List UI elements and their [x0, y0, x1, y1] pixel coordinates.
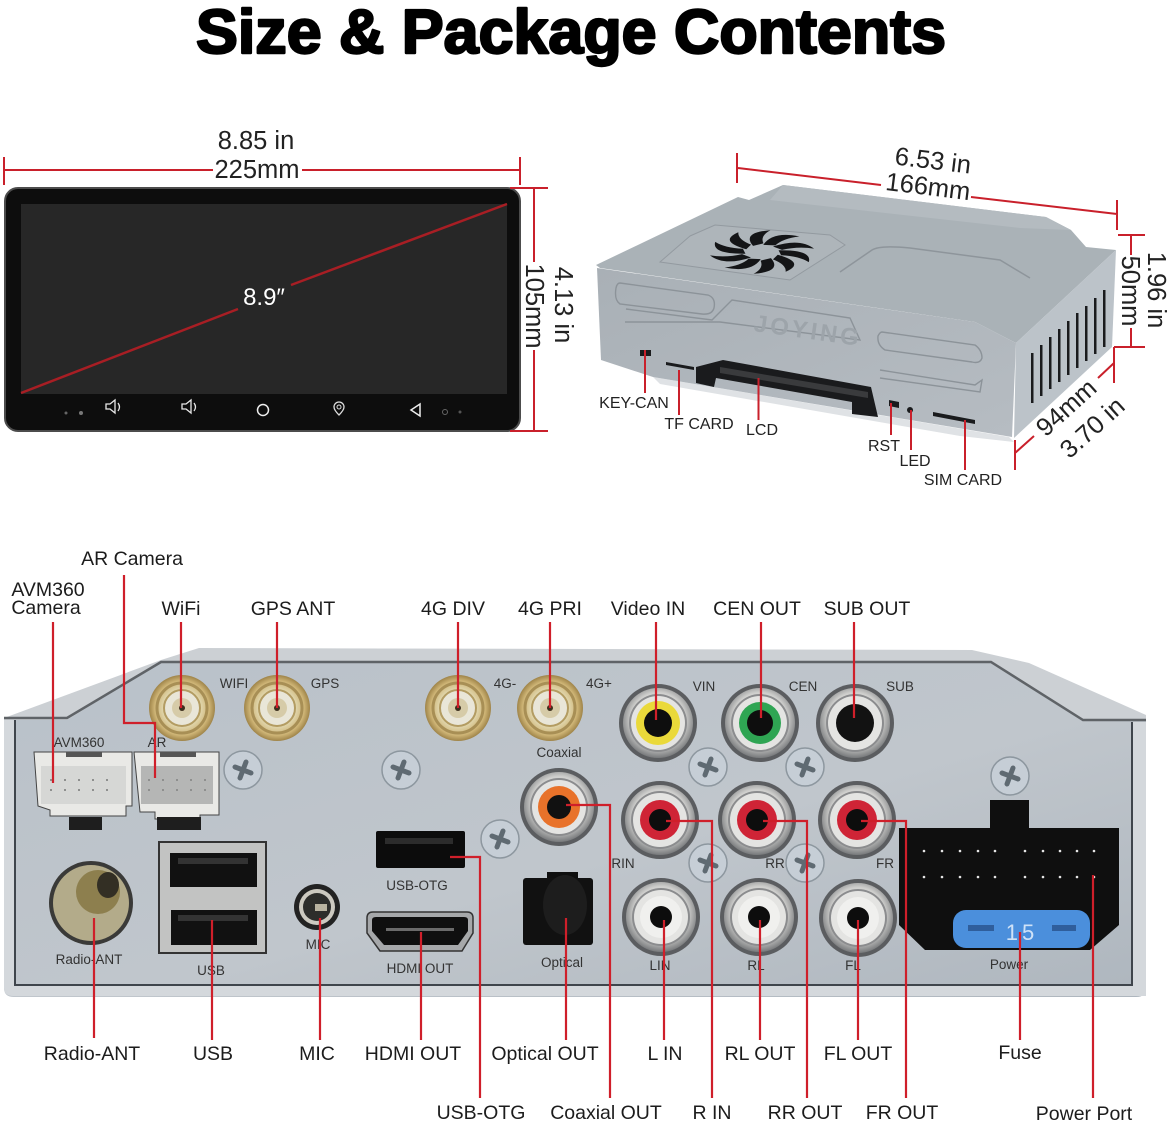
bottom port labels: RL OUT: [725, 1043, 795, 1065]
icon: camera sockets: [34, 752, 219, 830]
silkscreen labels: Power: [990, 957, 1029, 972]
icon: cooling fan: [707, 228, 817, 276]
width dimension: 225mm: [214, 156, 300, 184]
diagonal measurement: 8.9″: [243, 284, 285, 311]
icon: optical port: [523, 872, 593, 945]
icon: RCA jacks: [520, 684, 897, 957]
bottom port labels: Optical OUT: [491, 1043, 599, 1065]
silkscreen labels: SUB: [886, 679, 914, 694]
top port labels: CEN OUT: [713, 598, 801, 620]
width dimension: [4, 127, 520, 185]
depth dimension: 3.70 in: [1055, 392, 1130, 464]
port callouts: KEY-CAN: [599, 395, 669, 412]
panel: main box with dimensions: [596, 142, 1170, 489]
icon: USB-OTG port: [376, 831, 465, 868]
top port labels: Camera: [11, 597, 81, 619]
width dimension: 8.85 in: [218, 127, 294, 155]
silkscreen labels: RIN: [611, 856, 635, 871]
silkscreen labels: VIN: [693, 679, 715, 694]
red leader lines: [53, 575, 1093, 1098]
silkscreen labels: USB-OTG: [386, 878, 448, 893]
icon: display unit: [5, 188, 520, 431]
port callouts: LED: [899, 453, 931, 470]
panel: rear connector panel: [4, 548, 1146, 1123]
silkscreen labels: Radio-ANT: [56, 952, 122, 967]
icon: HDMI port: [367, 912, 473, 951]
silkscreen labels: FR: [876, 856, 894, 871]
icon: metal box: [596, 185, 1116, 442]
silkscreen labels: CEN: [789, 679, 817, 694]
icon: USB ports: [159, 842, 266, 953]
silkscreen labels: USB: [197, 963, 225, 978]
icon: screws: [224, 748, 1029, 882]
silkscreen labels: RR: [765, 856, 785, 871]
icon: metal box: JOYING: [752, 310, 864, 352]
bottom port labels: Fuse: [998, 1042, 1042, 1064]
icon: antenna connectors: [149, 675, 583, 741]
silkscreen labels: 4G+: [586, 676, 612, 691]
bottom port labels: L IN: [647, 1043, 683, 1065]
icon: power connector and fuse: [899, 800, 1119, 950]
silkscreen labels: Coaxial: [536, 745, 582, 760]
length dimension: [737, 142, 1117, 230]
depth dimension: [1015, 347, 1130, 470]
height dimension: 105mm: [520, 263, 548, 349]
length dimension: 166mm: [884, 168, 972, 206]
icon: mic jack: [294, 884, 340, 930]
port callouts: TF CARD: [664, 416, 734, 433]
port callouts: SIM CARD: [924, 472, 1002, 489]
silkscreen labels: WIFI: [220, 676, 248, 691]
silkscreen labels: FL: [845, 958, 861, 973]
silkscreen labels: AVM360: [54, 735, 104, 750]
bottom port labels: Radio-ANT: [44, 1043, 140, 1065]
height dimension: 4.13 in: [549, 267, 577, 343]
top port labels: 4G DIV: [421, 598, 485, 620]
port callouts: RST: [868, 438, 900, 455]
silkscreen labels: GPS: [311, 676, 339, 691]
top port labels: Video IN: [611, 598, 685, 620]
diagonal measurement: [21, 204, 507, 393]
top port labels: AR Camera: [81, 548, 183, 570]
top port labels: AVM360: [11, 579, 85, 601]
bottom port labels: HDMI OUT: [365, 1043, 461, 1065]
height dimension: [1114, 235, 1170, 347]
silkscreen labels: LIN: [649, 958, 671, 973]
port callouts: LCD: [746, 422, 778, 439]
icon: chassis: [4, 648, 1146, 997]
bottom port labels: MIC: [299, 1043, 335, 1065]
silkscreen labels: [54, 676, 1029, 978]
length dimension: 6.53 in: [893, 142, 973, 180]
title: Size & Package Contents: [196, 0, 946, 67]
port callouts: [599, 350, 1002, 489]
icon: power connector and fuse: 15: [1006, 920, 1038, 945]
silkscreen labels: HDMI OUT: [387, 961, 453, 976]
silkscreen labels: AR: [148, 735, 167, 750]
bottom port labels: [44, 1042, 1133, 1123]
top port labels: 4G PRI: [518, 598, 582, 620]
height dimension: 1.96 in: [1142, 252, 1170, 328]
silkscreen labels: 4G-: [494, 676, 516, 691]
silkscreen labels: RL: [747, 958, 765, 973]
depth dimension: 94mm: [1031, 374, 1102, 442]
height dimension: 50mm: [1116, 256, 1144, 326]
icon: radio antenna socket: [49, 861, 133, 945]
top port labels: WiFi: [162, 598, 200, 620]
bottom port labels: USB: [193, 1043, 233, 1065]
height dimension: [510, 188, 577, 431]
top port labels: [11, 548, 910, 620]
top port labels: GPS ANT: [251, 598, 335, 620]
silkscreen labels: Optical: [541, 955, 583, 970]
bottom port labels: FL OUT: [824, 1043, 892, 1065]
panel: head unit screen with dimensions: [4, 127, 577, 431]
silkscreen labels: MIC: [306, 937, 331, 952]
top port labels: SUB OUT: [824, 598, 910, 620]
